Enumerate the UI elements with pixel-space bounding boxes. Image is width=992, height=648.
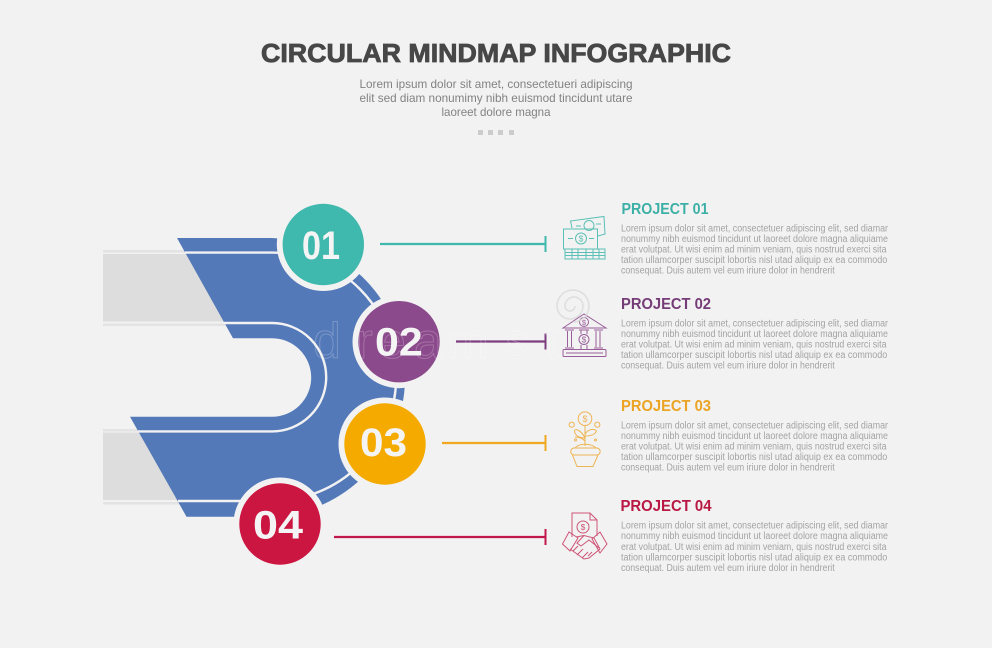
project 02 text — [621, 296, 889, 372]
connector line 03 — [442, 435, 546, 451]
project 02 text: PROJECT 02 — [621, 296, 711, 313]
number badge 02: 02 — [375, 320, 423, 364]
subtitle text block: Lorem ipsum dolor sit amet, consectetueri adipiscing — [360, 77, 632, 91]
watermark: dreamst — [313, 313, 559, 369]
number badge 01 — [277, 198, 370, 291]
project 01 text: PROJECT 01 — [622, 201, 709, 218]
project 01 text: nonummy nibh euismod tincidunt ut laoreet dolore magna aliquiame — [621, 234, 888, 245]
project 04 text: nonummy nibh euismod tincidunt ut laoreet dolore magna aliquiame — [621, 531, 888, 542]
project 03 text: tation ullamcorper suscipit lobortis nisl utad aliquip ex ea commodo — [621, 452, 887, 463]
project 01 text: Lorem ipsum dolor sit amet, consectetuer adipiscing elit, sed diamar — [621, 224, 889, 234]
title: CIRCULAR MINDMAP INFOGRAPHIC — [261, 40, 731, 68]
icon: bank building — [563, 314, 606, 356]
project 01 text: consequat. Duis autem vel eum iriure dolor in hendrerit — [621, 266, 835, 277]
project 02 text: tation ullamcorper suscipit lobortis nisl utad aliquip ex ea commodo — [621, 350, 887, 361]
number badge 03: 03 — [360, 421, 407, 465]
project 04 text: consequat. Duis autem vel eum iriure dolor in hendrerit — [621, 563, 835, 574]
project 03 text: nonummy nibh euismod tincidunt ut laoreet dolore magna aliquiame — [621, 431, 888, 442]
project 04 text: tation ullamcorper suscipit lobortis nisl utad aliquip ex ea commodo — [621, 552, 887, 563]
project 01 text: tation ullamcorper suscipit lobortis nisl utad aliquip ex ea commodo — [621, 255, 887, 266]
connector line 02 — [456, 334, 546, 350]
title separator dots — [478, 130, 514, 135]
project 03 text: consequat. Duis autem vel eum iriure dolor in hendrerit — [621, 462, 835, 474]
icon: money bills: $ — [579, 234, 584, 244]
number badge 04 — [234, 478, 326, 570]
grey panel: lower tail — [103, 429, 180, 504]
icon: bank building: $ — [582, 318, 587, 327]
project 03 text — [621, 398, 889, 474]
subtitle text block — [360, 77, 633, 119]
project 03 text: PROJECT 03 — [621, 398, 711, 415]
icon: handshake and document: $ — [581, 522, 586, 532]
project 04 text: erat volutpat. Ut wisi enim ad minim veniam, quis nostrud exerci sita — [621, 542, 887, 553]
project 02 text: consequat. Duis autem vel eum iriure dolor in hendrerit — [621, 360, 835, 372]
project 02 text: erat volutpat. Ut wisi enim ad minim veniam, quis nostrud exerci sita — [621, 339, 887, 350]
project 03 text: Lorem ipsum dolor sit amet, consectetuer adipiscing elit, sed diamar — [621, 420, 889, 431]
grey panel: upper tail — [103, 250, 225, 326]
number badge 01: 01 — [302, 224, 340, 268]
project 02 text: Lorem ipsum dolor sit amet, consectetuer adipiscing elit, sed diamar — [621, 318, 889, 329]
icon: handshake and document — [562, 513, 607, 559]
subtitle text block: laoreet dolore magna — [442, 105, 551, 119]
icon: money bills — [564, 216, 605, 259]
icon: bank building: $ — [582, 334, 587, 344]
project 01 text: erat volutpat. Ut wisi enim ad minim veniam, quis nostrud exerci sita — [621, 245, 887, 256]
number badge 02 — [352, 295, 446, 388]
subtitle text block: elit sed diam nonumimy nibh euismod tincidunt utare — [360, 91, 633, 105]
connector line 01 — [380, 236, 546, 252]
icon: money plant in pot — [569, 412, 600, 466]
project 04 text — [620, 498, 889, 574]
connector line 04 — [334, 529, 546, 545]
icon: money plant in pot: $ — [582, 414, 588, 424]
number badge 03 — [338, 398, 432, 490]
project 04 text: PROJECT 04 — [620, 498, 712, 515]
number badge 04: 04 — [253, 504, 304, 548]
blue circular mindmap arc — [130, 238, 405, 517]
project 04 text: Lorem ipsum dolor sit amet, consectetuer adipiscing elit, sed diamar — [621, 521, 889, 532]
watermark — [313, 290, 589, 369]
project 03 text: erat volutpat. Ut wisi enim ad minim veniam, quis nostrud exerci sita — [621, 441, 887, 452]
project 02 text: nonummy nibh euismod tincidunt ut laoreet dolore magna aliquiame — [621, 329, 888, 340]
project 01 text — [621, 201, 889, 277]
